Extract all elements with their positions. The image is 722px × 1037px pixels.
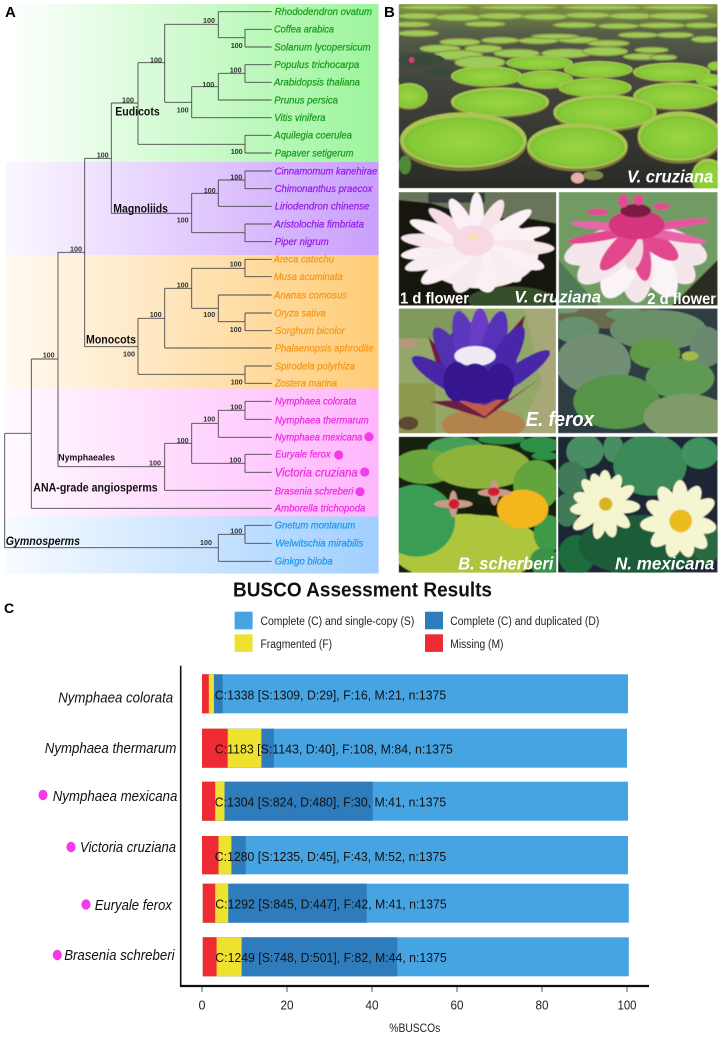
species labels: gymnosperms [275,521,363,568]
bar: Brasenia schreberi: C:1249 [S:748, D:501], F:82, M:44, n:1375 [215,950,447,965]
legend: Complete (C) and duplicated (D) [450,616,599,628]
panel letter C: C [4,600,14,616]
species labels: magnoliids: Cinnamomum kanehirae [275,166,378,177]
photo captions: 2 d flower [647,291,716,308]
bootstrap support values: 100 [231,147,243,156]
bootstrap support values: 100 [202,80,214,89]
tree branches [5,12,272,561]
species labels: eudicots: Solanum lycopersicum [274,42,371,53]
clade labels [6,104,168,548]
bootstrap support values: 100 [203,415,215,424]
species labels: eudicots: Vitis vinifera [274,113,326,124]
legend [235,612,599,652]
bar: Victoria cruziana [202,836,628,874]
species axis labels: Euryale ferox [95,897,172,914]
species axis labels: Victoria cruziana [80,839,176,856]
bar chart [202,674,629,976]
species labels: ANA-grade: Amborella trichopoda [274,504,366,515]
bootstrap support values: 100 [177,436,189,445]
bootstrap support values: 100 [231,378,243,387]
bar: Nymphaea thermarum [202,729,627,768]
species labels: ANA-grade: Victoria cruziana [275,465,358,479]
bootstrap support values: 100 [150,310,162,319]
species labels: ANA-grade: Nymphaea thermarum [275,415,369,426]
bootstrap support values: 100 [149,459,161,468]
panel B: photographs [378,4,722,583]
bar: Nymphaea colorata [202,674,628,713]
bootstrap support values: 100 [177,105,189,114]
species axis labels: Brasenia schreberi [64,947,175,964]
band: ANA-grade angiosperms [5,388,379,516]
species labels: magnoliids [273,166,378,248]
species labels: gymnosperms: Welwitschia mirabilis [275,539,363,550]
clade labels: Magnoliids [113,201,168,215]
species labels: magnoliids: Piper nigrum [275,237,329,248]
species labels: eudicots: Papaver setigerum [275,148,353,159]
bar: Brasenia schreberi [203,937,629,976]
bar: Nymphaea mexicana [202,782,628,821]
species labels: eudicots: Rhododendron ovatum [275,7,372,18]
species axis labels [38,690,177,964]
photo: V. cruziana pads and flowers [390,4,722,313]
bar: Nymphaea mexicana: C:1304 [S:824, D:480], F:30, M:41, n:1375 [215,794,446,810]
species axis labels: Nymphaea thermarum [45,740,176,757]
species labels: monocots: Areca catechu [273,255,334,266]
species labels: eudicots [273,7,372,159]
bootstrap support values: 100 [230,325,242,334]
axes [180,666,182,986]
photo content: 2 day flower [559,192,718,306]
species labels: gymnosperms: Ginkgo biloba [275,557,333,568]
clade labels: Gymnosperms [6,534,80,548]
band: monocots [5,255,379,388]
photo content: purple E. ferox flower [398,308,556,442]
photo captions: B. scherberi [458,554,554,574]
species labels: monocots: Phalaenopsis aphrodite [275,343,374,354]
species labels: ANA-grade [274,397,369,515]
photo: E. ferox flower, leaves, B. schreberi and N. mexicana [398,308,718,573]
species labels: ANA-grade: Nymphaea mexicana [275,433,363,444]
x axis title: %BUSCOs [389,1023,441,1035]
chart title: BUSCO Assessment Results [233,580,492,602]
photo captions: 1 d flower [400,290,469,308]
species labels: monocots: Musa acuminata [274,272,343,283]
bootstrap support values: 100 [123,349,135,358]
species labels: monocots: Sorghum bicolor [275,326,346,337]
bootstrap support values: 100 [231,41,243,50]
bar: Victoria cruziana: C:1280 [S:1235, D:45], F:43, M:52, n:1375 [215,849,446,864]
photo content: 1 day flower [399,192,556,313]
species labels: magnoliids: Chimonanthus praecox [275,184,373,195]
x axis ticks and labels: 100 [618,998,636,1012]
x axis ticks and labels: 60 [450,998,464,1012]
bootstrap support values: 100 [203,310,215,319]
species labels: monocots: Oryza sativa [274,308,326,319]
band: magnoliids [5,162,379,255]
bootstrap support values: 100 [97,150,109,159]
species labels: eudicots: Prunus persica [274,95,338,106]
band: eudicots [5,4,379,162]
x axis ticks and labels [198,987,636,1012]
bootstrap support values: 100 [230,173,242,182]
species labels: eudicots: Populus trichocarpa [274,60,360,71]
species labels: eudicots: Coffea arabica [274,25,334,36]
photo content: B. schreberi leaves and flowers [398,436,556,573]
clade labels: Nymphaeales [58,452,115,463]
bootstrap support values: 100 [204,186,216,195]
photo captions: N. mexicana [615,554,715,574]
clade labels: Monocots [86,333,136,347]
species labels: ANA-grade: Brasenia schreberi [275,486,354,497]
species labels: magnoliids: Liriodendron chinense [275,202,370,213]
bootstrap support values: 100 [230,66,242,75]
bootstrap support values: 100 [177,215,189,224]
species labels: gymnosperms: Gnetum montanum [275,521,355,532]
panel letter B: B [384,4,395,21]
species labels: monocots: Spirodela polyrhiza [275,361,355,372]
x axis ticks and labels: 20 [280,998,294,1012]
x axis ticks and labels: 0 [198,998,206,1012]
bootstrap support values: 100 [177,280,189,289]
bootstrap support values: 100 [150,56,162,65]
sequenced species markers [334,432,374,496]
species labels: ANA-grade: Euryale ferox [275,450,332,461]
species axis labels: Nymphaea colorata [58,690,173,706]
bar: Nymphaea colorata: C:1338 [S:1309, D:29], F:16, M:21, n:1375 [215,688,446,702]
x axis ticks and labels: 40 [366,998,378,1012]
bootstrap support values: 100 [122,95,134,104]
legend: Complete (C) and single-copy (S) [260,616,414,628]
photo content: prickly E. ferox leaves [558,308,718,434]
x axis ticks and labels: 80 [536,998,548,1012]
species labels: monocots: Ananas comosus [273,290,347,301]
species labels: eudicots: Aquilegia coerulea [273,131,352,142]
clade labels: ANA-grade angiosperms [33,480,158,494]
bootstrap support values: 100 [70,244,82,253]
photo captions [400,166,716,574]
species axis labels: Nymphaea mexicana [53,788,177,805]
panel A: phylogenetic tree [5,4,379,574]
bootstrap support values [43,16,243,547]
species labels: ANA-grade: Nymphaea colorata [275,397,357,408]
bootstrap support values: 100 [229,455,241,464]
species labels: eudicots: Arabidopsis thaliana [273,78,360,89]
bootstrap support values: 100 [230,527,242,536]
photo captions: V. cruziana [514,288,601,306]
bar: Euryale ferox [203,884,629,923]
photo captions: V. cruziana [627,166,714,186]
x axis line [180,985,649,987]
species labels: monocots: Zostera marina [274,379,337,390]
bootstrap support values: 100 [230,260,242,269]
panel letter A: A [5,4,16,21]
panel C: BUSCO assessment [4,580,649,1035]
clade labels: Eudicots [115,104,160,118]
bar: Nymphaea thermarum: C:1183 [S:1143, D:40], F:108, M:84, n:1375 [215,742,453,756]
bootstrap support values: 100 [200,538,212,547]
bootstrap support values: 100 [43,351,55,360]
legend: Missing (M) [450,639,504,651]
bootstrap support values: 100 [203,16,215,25]
photo content: giant lily pads on water [390,4,722,197]
legend: Fragmented (F) [260,639,332,651]
photo captions: E. ferox [526,409,595,431]
photo content: N. mexicana leaves and flowers [555,434,720,575]
species labels: monocots [273,255,374,390]
species labels: magnoliids: Aristolochia fimbriata [273,219,364,230]
bar: Euryale ferox: C:1292 [S:845, D:447], F:42, M:41, n:1375 [215,896,447,912]
band: gymnosperms [5,516,379,574]
bootstrap support values: 100 [230,403,242,412]
